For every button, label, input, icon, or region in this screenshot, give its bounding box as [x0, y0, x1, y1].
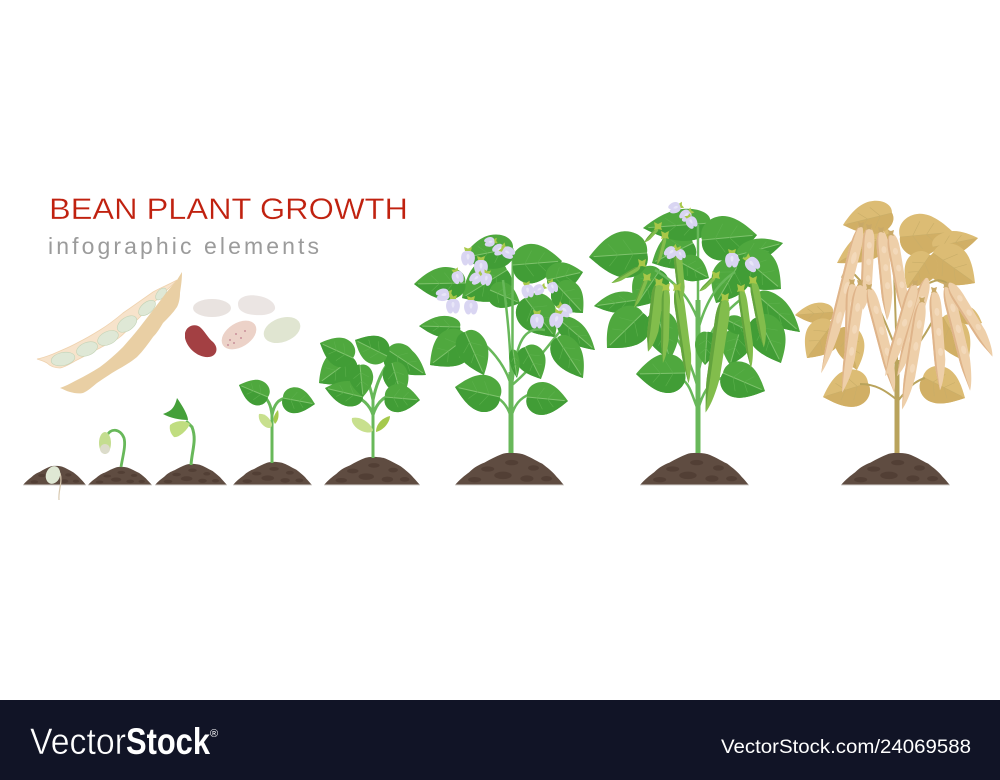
root: [59, 473, 61, 500]
upper pod half: [37, 280, 177, 368]
green pods: [611, 227, 770, 414]
left leaf: [234, 373, 273, 409]
soil mound: [23, 466, 86, 485]
pale green bean: [260, 312, 304, 348]
stage 8: dried plant with mature pods: [793, 197, 1000, 485]
stem and branches: [352, 358, 392, 458]
dry pods: [818, 224, 1000, 411]
seed: [43, 464, 63, 486]
stem: [186, 421, 194, 465]
back leaves: [451, 252, 571, 349]
speckled pink bean: [217, 315, 261, 355]
bean seed varieties: [185, 295, 304, 357]
soil mound: [640, 453, 749, 485]
footer logo: Vector: [30, 721, 126, 762]
leaves: [587, 213, 809, 408]
red kidney bean: [185, 325, 216, 357]
back leaves: [620, 207, 757, 317]
stage 2: sprout: [88, 430, 152, 485]
leaves: [414, 231, 602, 417]
stem and branches: [894, 360, 900, 453]
cotyledon: [170, 421, 190, 437]
lower pod half: [60, 272, 182, 393]
seed head: [99, 432, 111, 454]
pod seeds: [50, 286, 169, 368]
white kidney bean: [238, 295, 275, 315]
soil mound: [841, 453, 950, 485]
flowers: [435, 236, 575, 329]
subtitle: infographic elements: [48, 233, 319, 259]
white bean: [193, 299, 231, 317]
soil mound: [155, 464, 227, 485]
stem and branches: [262, 395, 286, 463]
stem: [107, 430, 125, 467]
right leaves: [349, 327, 433, 414]
footer logo bold: Stock: [126, 721, 210, 762]
soil mound: [233, 462, 312, 485]
soil mound: [455, 453, 564, 485]
stage 3: seedling: [155, 398, 227, 485]
dry pod calyxes: [849, 222, 949, 303]
stage 1: germinating seed: [23, 464, 86, 500]
registered mark: ®: [210, 728, 218, 740]
open bean pod with seeds: [37, 272, 182, 393]
left leaves: [309, 330, 375, 409]
stage 6: flowering plant: [414, 231, 602, 485]
image id: VectorStock.com/24069588: [721, 737, 971, 758]
flowers: [662, 200, 763, 274]
stage 5: leafy plant: [309, 327, 433, 485]
stem and branches: [696, 300, 700, 453]
cotyledons: [259, 414, 272, 428]
right leaf: [280, 385, 317, 417]
stem and branches: [508, 372, 514, 453]
title: BEAN PLANT GROWTH: [49, 193, 408, 226]
young leaves: [163, 398, 188, 420]
dry leaves: [793, 197, 987, 415]
pod calyxes: [638, 222, 757, 301]
soil mound: [88, 467, 152, 485]
stage 7: plant with green pods: [587, 200, 809, 485]
soil mound: [324, 457, 420, 485]
footer bar: [0, 700, 1000, 780]
cotyledons: [352, 418, 373, 433]
stage 4: young plant: [233, 373, 317, 485]
